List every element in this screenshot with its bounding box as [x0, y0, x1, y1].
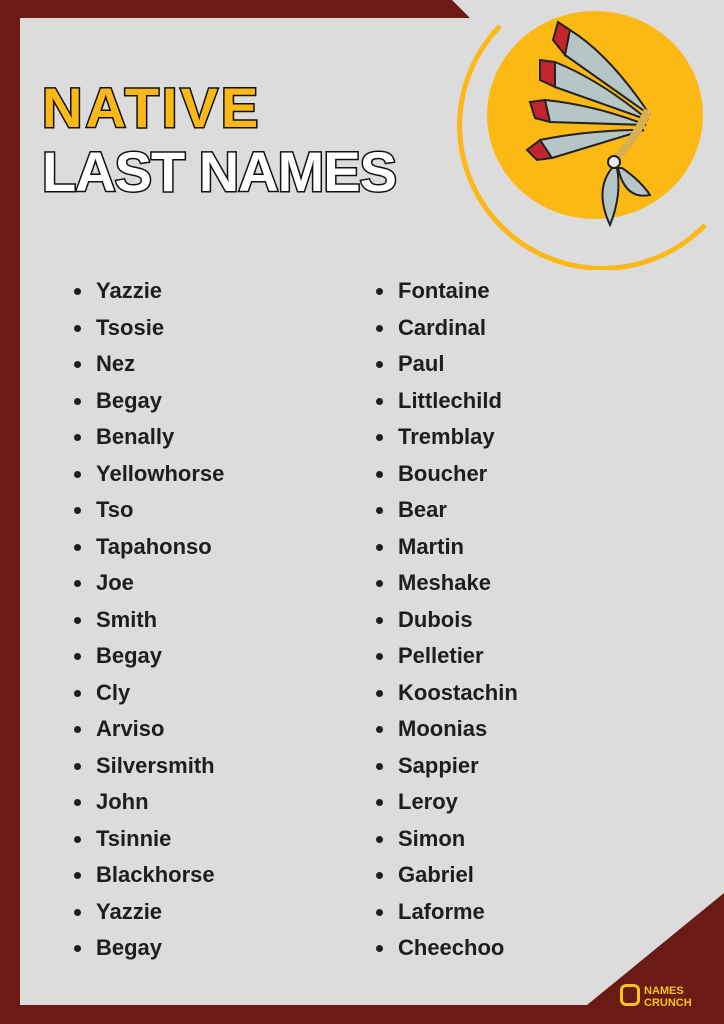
list column 1: Begay: [96, 935, 162, 960]
list column 2: Cardinal: [398, 314, 486, 340]
list column 1: Tsosie: [96, 314, 164, 340]
list column 1: Blackhorse: [96, 862, 215, 887]
list column 1: Yazzie: [96, 898, 162, 924]
list column 1: John: [96, 789, 149, 814]
list column 2: Paul: [398, 351, 444, 376]
list column 2: Pelletier: [398, 643, 484, 668]
list column 1: Benally: [96, 424, 174, 449]
title: LAST NAMES: [42, 140, 396, 203]
list column 2: Fontaine: [398, 278, 490, 303]
list column 1: Tso: [96, 497, 133, 522]
list column 1: Begay: [96, 643, 162, 668]
list column 2: Martin: [398, 534, 464, 558]
list column 1: Nez: [96, 351, 135, 376]
title: NATIVE: [42, 76, 261, 139]
list column 1: [74, 278, 224, 960]
list column 1: Begay: [96, 388, 162, 412]
list column 1: Silversmith: [96, 752, 215, 778]
list column 1: Smith: [96, 606, 157, 632]
list column 1: Joe: [96, 570, 134, 595]
list column 2: Sappier: [398, 752, 479, 778]
list column 1: Yazzie: [96, 278, 162, 303]
list column 1: Yellowhorse: [96, 460, 224, 486]
list column 2: [376, 278, 518, 960]
logo: NAMES: [644, 985, 684, 997]
list column 2: Simon: [398, 826, 465, 850]
icon: headdress in yellow circle: [457, 11, 707, 270]
list column 2: Leroy: [398, 789, 458, 814]
list column 2: Koostachin: [398, 680, 518, 704]
logo: CRUNCH: [644, 997, 692, 1009]
list column 1: Tapahonso: [96, 534, 212, 558]
list column 2: Littlechild: [398, 388, 502, 412]
list column 2: Dubois: [398, 606, 473, 632]
list column 2: Moonias: [398, 716, 487, 741]
list column 2: Gabriel: [398, 862, 474, 887]
list column 2: Laforme: [398, 898, 485, 924]
list column 1: Arviso: [96, 716, 164, 741]
list column 2: Tremblay: [398, 424, 495, 449]
list column 2: Bear: [398, 497, 447, 522]
list column 2: Boucher: [398, 460, 487, 486]
list column 1: Tsinnie: [96, 826, 171, 850]
title: [42, 76, 396, 203]
list column 2: Cheechoo: [398, 935, 504, 960]
list column 2: Meshake: [398, 570, 491, 595]
list column 1: Cly: [96, 680, 130, 704]
logo: [620, 984, 692, 1009]
